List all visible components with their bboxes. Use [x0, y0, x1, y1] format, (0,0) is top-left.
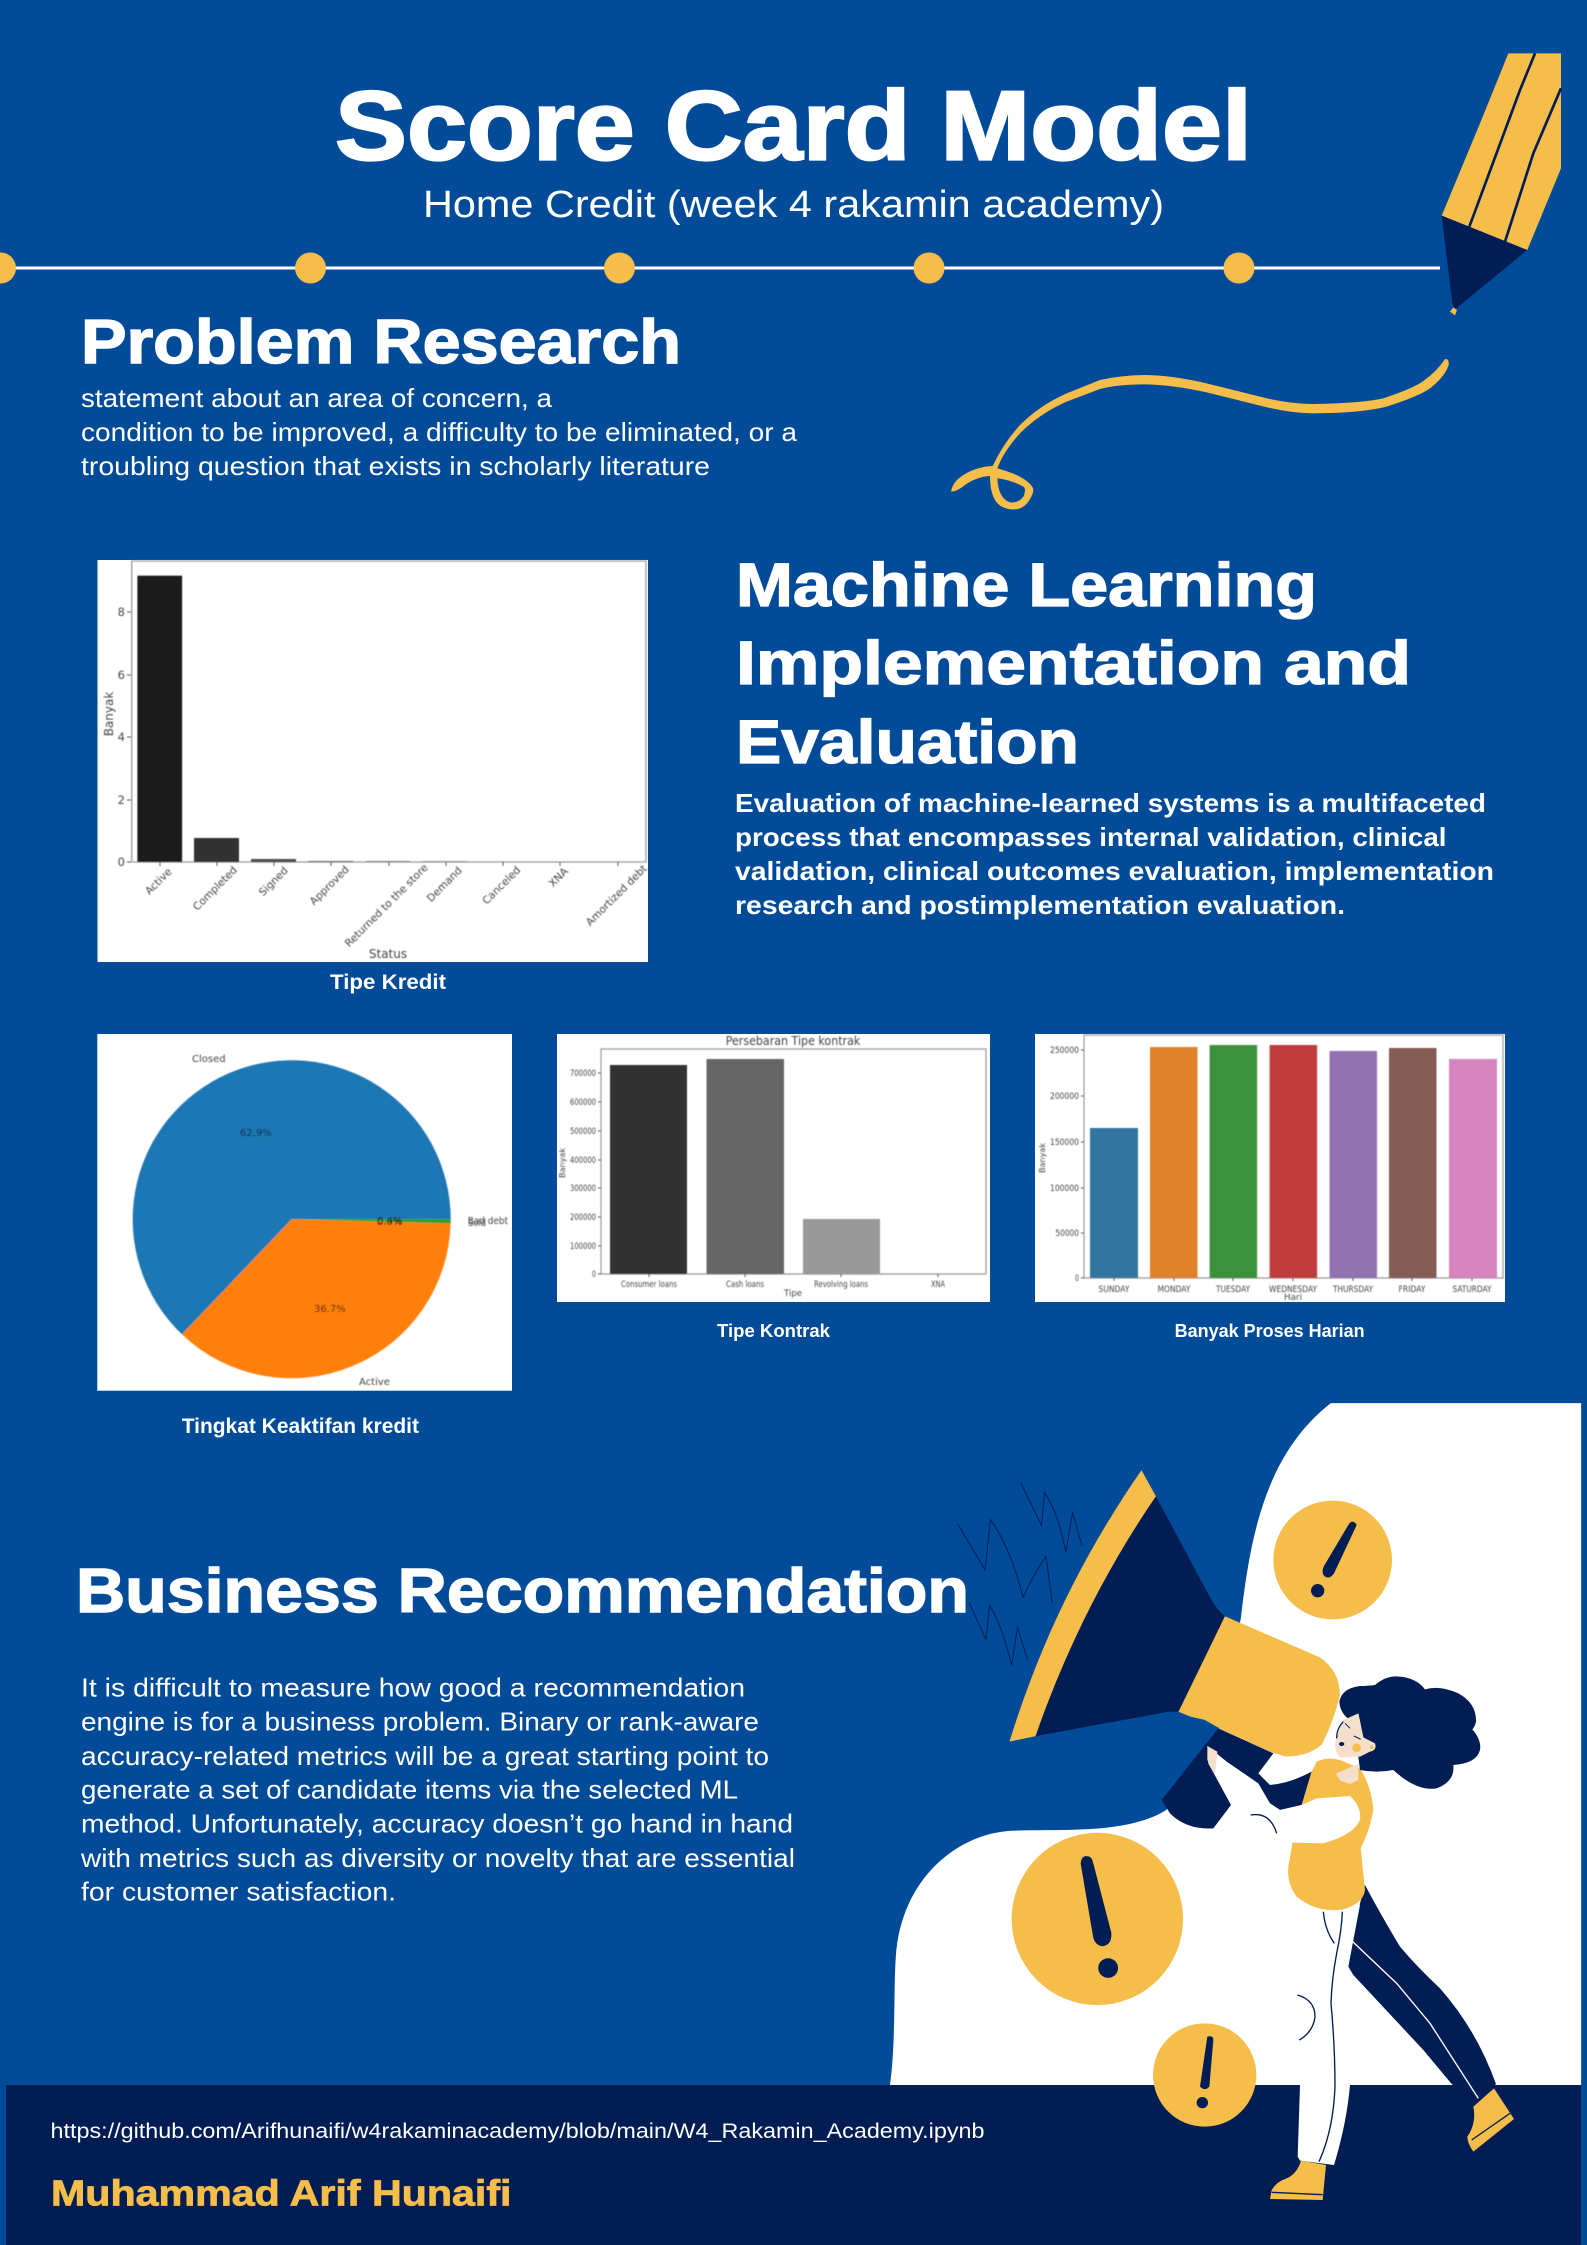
text: business recommendation description: with metrics such as diversity or novelty that are essential — [80, 1843, 795, 1873]
bar chart: tipe kontrak: Revolving loans — [814, 1280, 868, 1290]
bar chart: banyak proses harian: SATURDAY — [1452, 1285, 1492, 1295]
bar chart: tipe kontrak: 400000 — [570, 1156, 596, 1166]
icon: pencil — [1442, 53, 1561, 315]
bar chart: banyak proses harian: WEDNESDAY — [1269, 1285, 1317, 1295]
bar chart: banyak proses harian — [1035, 1034, 1505, 1303]
bar chart: tipe kontrak: 0 — [592, 1270, 596, 1280]
bar chart: tipe kredit: Signed — [257, 865, 291, 899]
caption: tipe kredit: Tipe Kredit — [330, 971, 446, 994]
heading: business recommendation: Business Recommendation — [76, 1557, 969, 1626]
bar chart: banyak proses harian: FRIDAY — [1398, 1285, 1426, 1295]
bar chart: banyak proses harian: Hari — [1284, 1293, 1302, 1303]
pie chart: tingkat keaktifan kredit: 36.7% — [314, 1304, 346, 1315]
bar chart: tipe kontrak: Tipe — [783, 1289, 802, 1299]
pie chart: tingkat keaktifan kredit: 0.0% — [377, 1217, 402, 1228]
bar chart: tipe kredit: 2 — [118, 793, 125, 807]
bar chart: tipe kredit: XNA — [547, 865, 571, 890]
heading: machine learning implementation and evaluation: Evaluation — [736, 708, 1079, 776]
bar chart: tipe kontrak: Cash loans — [726, 1280, 764, 1290]
bar chart: tipe kontrak — [557, 1034, 990, 1302]
bar chart: tipe kredit: Amortized debt — [584, 863, 650, 929]
bar chart: banyak proses harian: 50000 — [1055, 1229, 1079, 1239]
bar chart: tipe kredit: Completed — [191, 864, 240, 913]
text: business recommendation description: It is difficult to measure how good a recommendation — [81, 1672, 745, 1702]
bar chart: tipe kontrak: 700000 — [570, 1069, 596, 1079]
bar chart: banyak proses harian: 150000 — [1050, 1138, 1079, 1148]
text: problem research description: condition to be improved, a difficulty to be eliminated, or a — [81, 417, 798, 447]
pie chart: tingkat keaktifan kredit: 0.4% — [377, 1216, 402, 1227]
bar chart: tipe kredit: Demand — [425, 865, 465, 905]
heading: machine learning implementation and evaluation: Machine Learning — [736, 551, 1317, 619]
timeline with dots — [0, 252, 1440, 284]
heading: machine learning implementation and evaluation: Implementation and — [736, 629, 1411, 697]
pie chart: tingkat keaktifan kredit: Active — [359, 1377, 390, 1388]
bar chart: tipe kredit: 6 — [118, 668, 125, 682]
illustration: woman with megaphone — [958, 1470, 1514, 2200]
bar chart: tipe kontrak: 600000 — [570, 1098, 596, 1108]
bar chart: tipe kontrak: XNA — [931, 1280, 946, 1290]
text: problem research description: statement about an area of concern, a — [81, 383, 553, 413]
text: machine learning description: validation, clinical outcomes evaluation, implementation — [735, 856, 1494, 886]
bar chart: tipe kredit: 4 — [118, 730, 125, 744]
text: business recommendation description — [80, 1672, 795, 1907]
bar chart: tipe kontrak: 500000 — [570, 1127, 596, 1137]
bar chart: tipe kontrak: 200000 — [570, 1213, 596, 1223]
pie chart: tingkat keaktifan kredit — [97, 1034, 512, 1391]
bar chart: tipe kredit: 8 — [118, 605, 125, 619]
text: machine learning description: research and postimplementation evaluation. — [735, 890, 1345, 920]
woman: upper body and hair — [1162, 1676, 1480, 1910]
woman: legs, shoes and bottom exclamation circle — [1153, 1885, 1514, 2200]
bar chart: banyak proses harian: 200000 — [1050, 1092, 1079, 1102]
text: problem research description: troubling question that exists in scholarly literature — [81, 451, 710, 481]
bar chart: tipe kontrak: 100000 — [570, 1242, 596, 1252]
bar chart: banyak proses harian: TUESDAY — [1215, 1285, 1250, 1295]
bar chart: tipe kredit: 0 — [118, 855, 125, 869]
footer band — [6, 2085, 1581, 2245]
caption: tingkat keaktifan kredit: Tingkat Keaktifan kredit — [182, 1415, 419, 1438]
text: machine learning description — [735, 788, 1494, 920]
icon: exclamation circle top — [1273, 1501, 1392, 1619]
caption: tipe kontrak: Tipe Kontrak — [717, 1321, 831, 1341]
bar chart: banyak proses harian: SUNDAY — [1098, 1285, 1130, 1295]
bar chart: tipe kredit: Banyak — [102, 692, 116, 736]
bar chart: tipe kredit: Returned to the store — [343, 862, 431, 950]
icon: megaphone — [970, 1470, 1340, 1826]
text: machine learning description: Evaluation of machine-learned systems is a multifaceted — [735, 788, 1486, 818]
bar chart: tipe kredit — [98, 560, 650, 962]
bar chart: tipe kontrak: Consumer loans — [621, 1280, 677, 1290]
heading: machine learning implementation and evaluation — [736, 551, 1411, 776]
text: business recommendation description: method. Unfortunately, accuracy doesn’t go hand in hand — [81, 1809, 793, 1839]
pie chart: tingkat keaktifan kredit: Bad debt — [468, 1216, 508, 1227]
pie chart: tingkat keaktifan kredit: Closed — [192, 1054, 226, 1065]
icon: sound zigzags — [958, 1483, 1082, 1665]
footer link: https://github.com/Arifhunaifi/w4rakaminacademy/blob/main/W4_Rakamin_Academy.ipynb — [50, 2120, 985, 2143]
heading: problem research: Problem Research — [81, 308, 681, 377]
bar chart: banyak proses harian: 250000 — [1050, 1046, 1079, 1056]
pie chart: tingkat keaktifan kredit: Sold — [468, 1218, 486, 1229]
caption: banyak proses harian: Banyak Proses Harian — [1175, 1321, 1365, 1341]
text: machine learning description: process that encompasses internal validation, clinical — [735, 822, 1446, 852]
bar chart: tipe kontrak: Banyak — [558, 1148, 567, 1178]
text: problem research description — [81, 383, 798, 481]
bar chart: tipe kredit: Active — [143, 866, 174, 897]
subtitle: Home Credit (week 4 rakamin academy) — [423, 184, 1164, 226]
bar chart: tipe kontrak: 300000 — [570, 1184, 596, 1194]
white background blob — [890, 1403, 1581, 2085]
pie chart: tingkat keaktifan kredit: 62.9% — [240, 1128, 272, 1139]
bar chart: tipe kredit: Status — [369, 947, 407, 961]
footer author name: Muhammad Arif Hunaifi — [51, 2172, 511, 2214]
bar chart: banyak proses harian: 0 — [1075, 1274, 1079, 1284]
bar chart: tipe kredit: Approved — [308, 864, 352, 908]
text: business recommendation description: accuracy-related metrics will be a great starting point to — [81, 1741, 769, 1771]
bar chart: banyak proses harian: Banyak — [1038, 1143, 1047, 1173]
text: business recommendation description: engine is for a business problem. Binary or rank-aware — [81, 1707, 759, 1737]
bar chart: banyak proses harian: MONDAY — [1158, 1285, 1191, 1295]
bar chart: banyak proses harian: 100000 — [1050, 1184, 1079, 1194]
icon: exclamation circle large — [1012, 1833, 1183, 2005]
bar chart: tipe kontrak: Persebaran Tipe kontrak — [726, 1034, 860, 1048]
text: business recommendation description: for customer satisfaction. — [81, 1877, 396, 1907]
text: business recommendation description: generate a set of candidate items via the selected ML — [81, 1774, 738, 1804]
icon: yellow squiggle — [951, 359, 1449, 510]
title: Score Card Model — [335, 70, 1252, 180]
bar chart: tipe kredit: Canceled — [480, 864, 523, 907]
bar chart: banyak proses harian: THURSDAY — [1332, 1285, 1373, 1295]
